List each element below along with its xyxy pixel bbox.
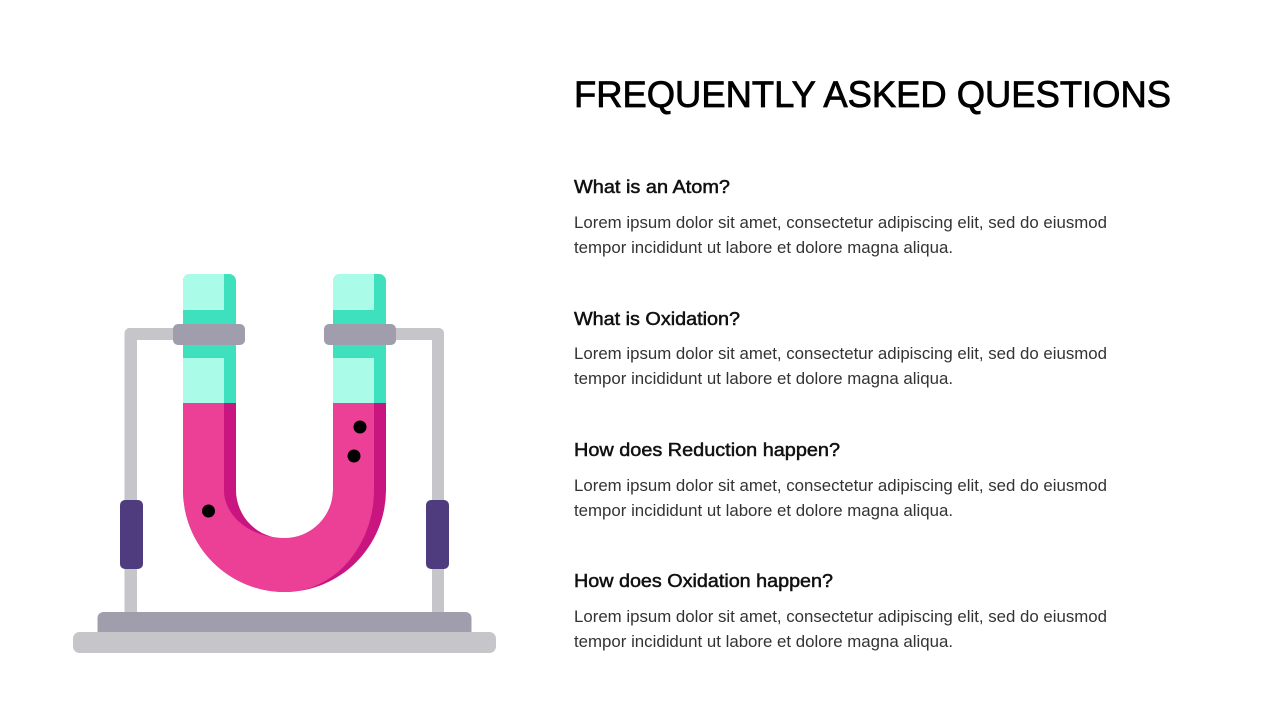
answer text [574,477,1107,520]
title: FREQUENTLY ASKED QUESTIONS [574,73,1171,115]
tube: left upper section [183,274,236,403]
question heading: What is Oxidation? [574,309,740,329]
tube: right upper section [333,274,386,403]
question 3 [574,440,1107,520]
answer text: Lorem ipsum dolor sit amet, consectetur adipiscing elit, sed do eiusmod [574,477,1107,495]
base: upper plate [98,612,472,634]
question 2 [574,309,1107,388]
answer text: tempor incididunt ut labore et dolore magna aliqua. [574,370,953,388]
question heading: What is an Atom? [574,177,730,197]
answer text: tempor incididunt ut labore et dolore magna aliqua. [574,502,953,520]
answer text: Lorem ipsum dolor sit amet, consectetur adipiscing elit, sed do eiusmod [574,345,1107,363]
answer text: tempor incididunt ut labore et dolore magna aliqua. [574,633,953,651]
clamp: right [324,324,396,345]
answer text: Lorem ipsum dolor sit amet, consectetur adipiscing elit, sed do eiusmod [574,608,1107,626]
tube: liquid front [183,403,374,592]
stand rod: right [390,328,444,612]
clamp: left [173,324,245,345]
question heading: How does Reduction happen? [574,440,840,460]
bubbles [202,420,366,518]
answer text: tempor incididunt ut labore et dolore magna aliqua. [574,239,953,257]
answer text: Lorem ipsum dolor sit amet, consectetur adipiscing elit, sed do eiusmod [574,214,1107,232]
rod grip: right [426,500,449,569]
illustration: U-shaped test tube on stand [73,274,496,653]
stand rod: left [124,328,180,612]
rod grip: left [120,500,143,569]
answer text [574,608,1107,651]
answer text [574,345,1107,388]
base: lower plate [73,632,496,653]
answer text [574,214,1107,257]
tube: liquid shaded back [183,403,386,592]
question heading: How does Oxidation happen? [574,571,833,591]
question 1 [574,177,1107,257]
question 4 [574,571,1107,651]
